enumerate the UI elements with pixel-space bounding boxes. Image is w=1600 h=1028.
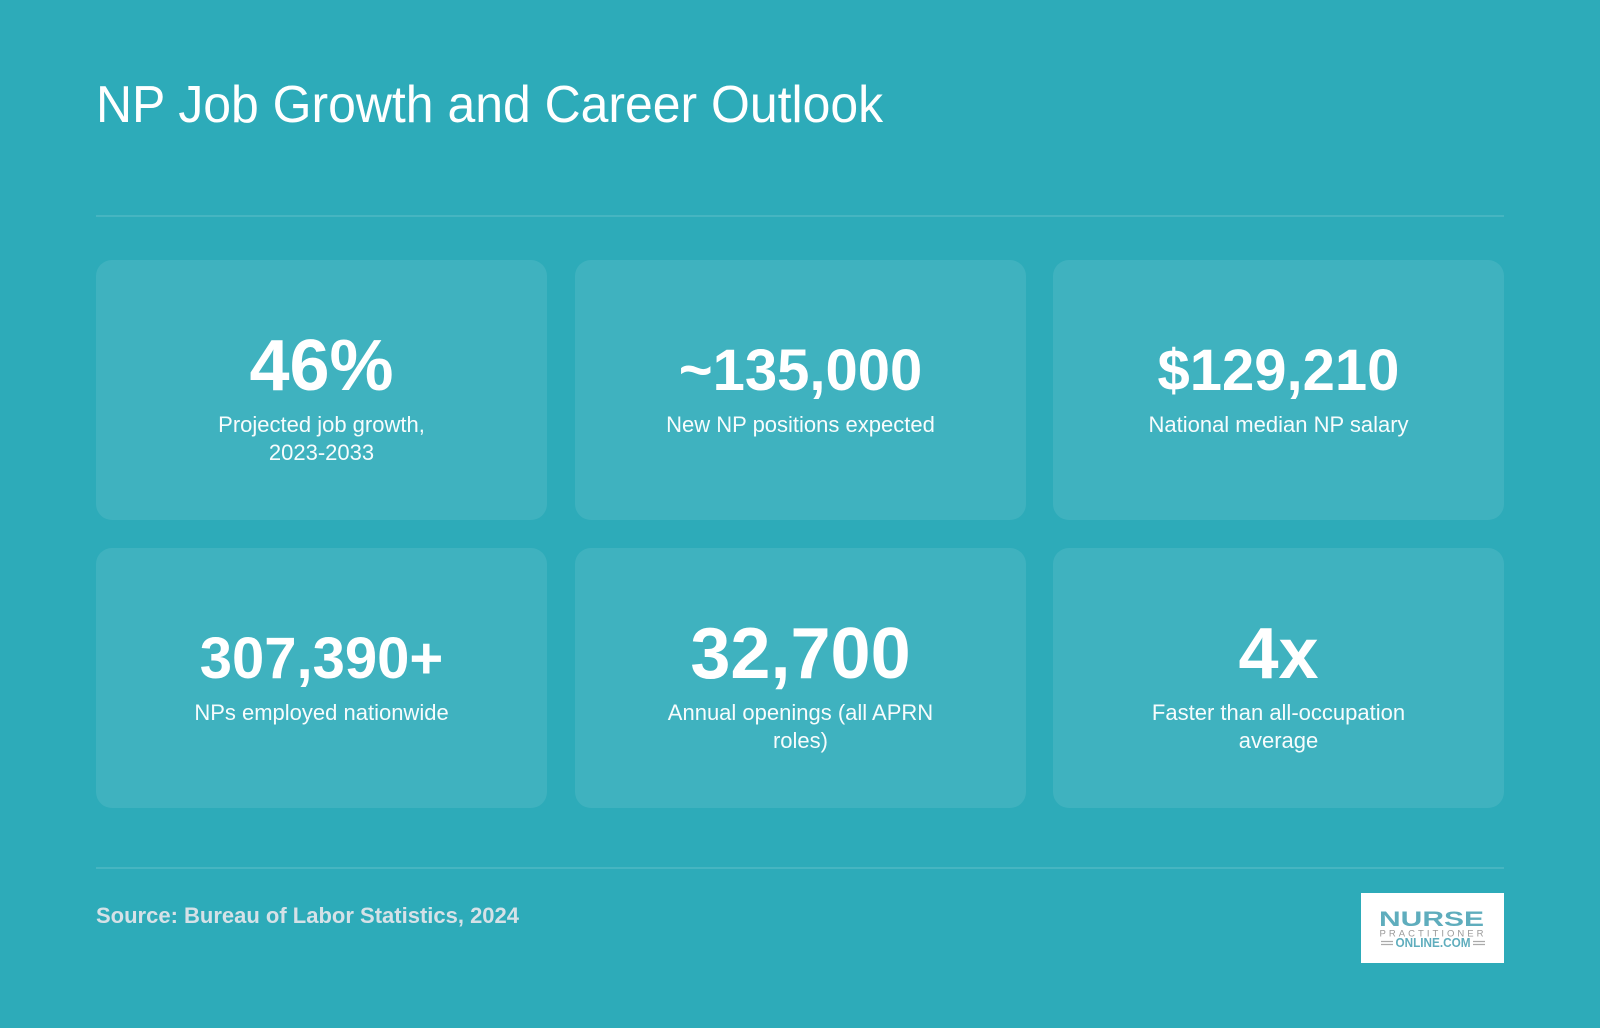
label (1152, 700, 1405, 753)
label: 2023-2033 (269, 440, 374, 465)
label (218, 412, 425, 465)
source note: Source: Bureau of Labor Statistics, 2024 (96, 903, 519, 928)
stat: ~135,000: ~135,000 (679, 338, 922, 403)
stat: 4x: 4x (1238, 614, 1319, 694)
label: Projected job growth, (218, 412, 425, 437)
panel: NPs employed (96, 548, 547, 808)
title: NP Job Growth and Career Outlook (96, 76, 883, 134)
label: New NP positions expected (666, 412, 935, 437)
label: Annual openings (all APRN (668, 700, 933, 725)
label: NPs employed nationwide (194, 700, 449, 725)
panel: new positions (575, 260, 1026, 520)
logo wordmark: NURSE (1379, 907, 1484, 931)
stat: $129,210: $129,210 (1158, 338, 1399, 403)
panel: annual openings (575, 548, 1026, 808)
logo wordmark: ONLINE.COM (1396, 936, 1470, 950)
panel: faster than average (1053, 548, 1504, 808)
label (668, 700, 933, 753)
label: Faster than all-occupation (1152, 700, 1405, 725)
stat: 46%: 46% (249, 326, 394, 406)
label: roles) (773, 728, 828, 753)
label: average (1239, 728, 1318, 753)
logo wordmark (1379, 907, 1485, 950)
panel: median salary (1053, 260, 1504, 520)
logo wordmark: PRACTITIONER (1380, 928, 1484, 940)
stat: 32,700: 32,700 (690, 614, 911, 694)
logo (1361, 893, 1504, 963)
label: National median NP salary (1148, 412, 1409, 437)
stat: 307,390+: 307,390+ (200, 626, 443, 691)
panel: projected job growth (96, 260, 547, 520)
